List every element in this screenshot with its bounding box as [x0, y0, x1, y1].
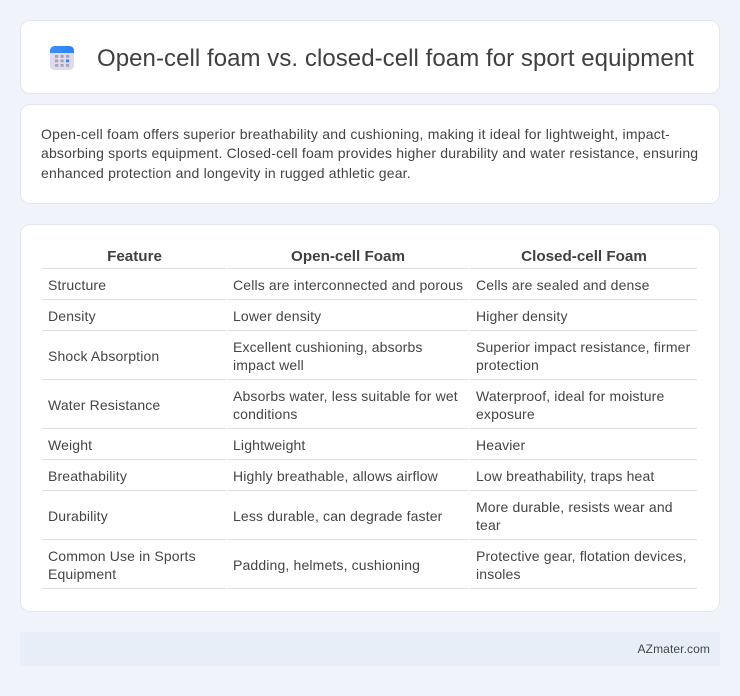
row: structure: Cells are interconnected and porous	[233, 277, 463, 293]
row: density: Density	[48, 308, 96, 324]
summary panel	[20, 104, 720, 204]
row: water resistance: Water Resistance	[48, 397, 160, 413]
header row: Closed-cell Foam	[521, 248, 647, 265]
row: water resistance	[48, 388, 664, 422]
row: water resistance: Absorbs water, less suitable for wet	[233, 388, 458, 404]
row: breathability	[48, 468, 654, 484]
row: shock absorption: Excellent cushioning, absorbs	[233, 339, 423, 355]
comparison table	[42, 248, 697, 589]
row: shock absorption: Superior impact resistance, firmer	[476, 339, 690, 355]
row: density	[48, 308, 568, 324]
summary text: enhanced protection and longevity in rugged athletic gear.	[41, 165, 411, 181]
row: water resistance: Waterproof, ideal for moisture	[476, 388, 664, 404]
row: breathability: Highly breathable, allows airflow	[233, 468, 438, 484]
row: water resistance: exposure	[476, 406, 535, 422]
header row: Feature	[107, 248, 162, 265]
row: common use: Protective gear, flotation devices,	[476, 548, 687, 564]
icon: calendar	[50, 46, 74, 70]
row: durability: Durability	[48, 508, 108, 524]
row: common use: Padding, helmets, cushioning	[233, 557, 420, 573]
row: shock absorption: Shock Absorption	[48, 348, 159, 364]
header panel	[20, 20, 720, 94]
row: durability	[48, 499, 673, 533]
summary text	[41, 126, 698, 181]
row: weight: Weight	[48, 437, 92, 453]
header row	[107, 248, 647, 265]
row: density: Higher density	[476, 308, 568, 324]
row: density: Lower density	[233, 308, 321, 324]
footer credit: AZmater.com	[638, 642, 710, 656]
row: structure	[48, 277, 650, 293]
row: shock absorption: impact well	[233, 357, 304, 373]
row: shock absorption	[48, 339, 690, 373]
row: weight	[48, 437, 525, 453]
row: common use	[48, 548, 687, 582]
row: durability: Less durable, can degrade faster	[233, 508, 442, 524]
row: common use: insoles	[476, 566, 521, 582]
footer bar	[20, 632, 720, 666]
summary text: absorbing sports equipment. Closed-cell foam provides higher durability and water resistance, ensuring	[41, 145, 698, 161]
summary text: Open-cell foam offers superior breathability and cushioning, making it ideal for lightweight, impact-	[41, 126, 670, 142]
row: structure: Cells are sealed and dense	[476, 277, 650, 293]
row: breathability: Breathability	[48, 468, 127, 484]
row: structure: Structure	[48, 277, 106, 293]
comparison table panel	[20, 224, 720, 612]
row: common use: Common Use in Sports	[48, 548, 196, 564]
row: weight: Lightweight	[233, 437, 305, 453]
row: common use: Equipment	[48, 566, 116, 582]
row: durability: tear	[476, 517, 501, 533]
row: durability: More durable, resists wear and	[476, 499, 673, 515]
row: shock absorption: protection	[476, 357, 539, 373]
header row: Open-cell Foam	[291, 248, 405, 265]
title: Open-cell foam vs. closed-cell foam for sport equipment	[97, 45, 694, 72]
row: water resistance: conditions	[233, 406, 298, 422]
row: weight: Heavier	[476, 437, 525, 453]
row: breathability: Low breathability, traps heat	[476, 468, 654, 484]
